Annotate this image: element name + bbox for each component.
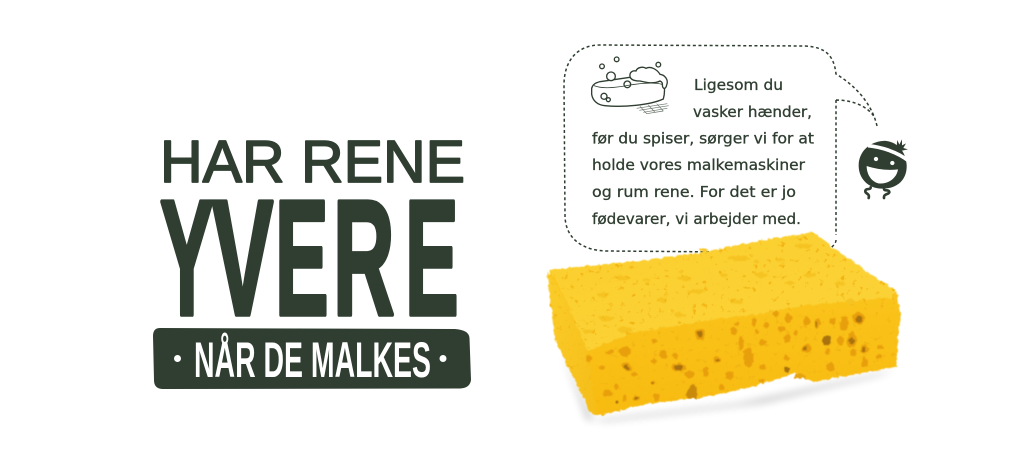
heading: Yvere: Y	[160, 167, 214, 350]
sponge body	[547, 232, 901, 415]
bubble text: og rum rene. For det er jo	[592, 183, 796, 201]
icon: mascot with headband	[859, 139, 908, 198]
banner: når de malkes	[153, 328, 471, 389]
heading: Yvere: V	[212, 168, 273, 350]
heading: Har rene: HAR RENE	[160, 128, 465, 195]
sponge holes	[586, 310, 883, 404]
bubble text: vasker hænder,	[693, 103, 812, 121]
sponge photo illustration	[547, 232, 901, 422]
heading: Yvere	[160, 166, 459, 350]
icon: soap with foam	[592, 57, 669, 114]
bubble text: fødevarer, vi arbejder med.	[592, 210, 801, 228]
banner: når de malkes: NÅR DE MALKES	[194, 332, 431, 388]
heading: Yvere: E	[405, 167, 459, 350]
bubble text: holde vores malkemaskiner	[592, 156, 806, 174]
bubble text: Ligesom du	[694, 76, 783, 94]
speech bubble outline	[564, 45, 877, 252]
bubble text: før du spiser, sørger vi for at	[592, 130, 814, 148]
bubble text	[592, 76, 814, 228]
heading: Yvere: R	[333, 166, 395, 350]
sponge shadow	[562, 352, 895, 422]
heading: Yvere: E	[275, 167, 329, 350]
